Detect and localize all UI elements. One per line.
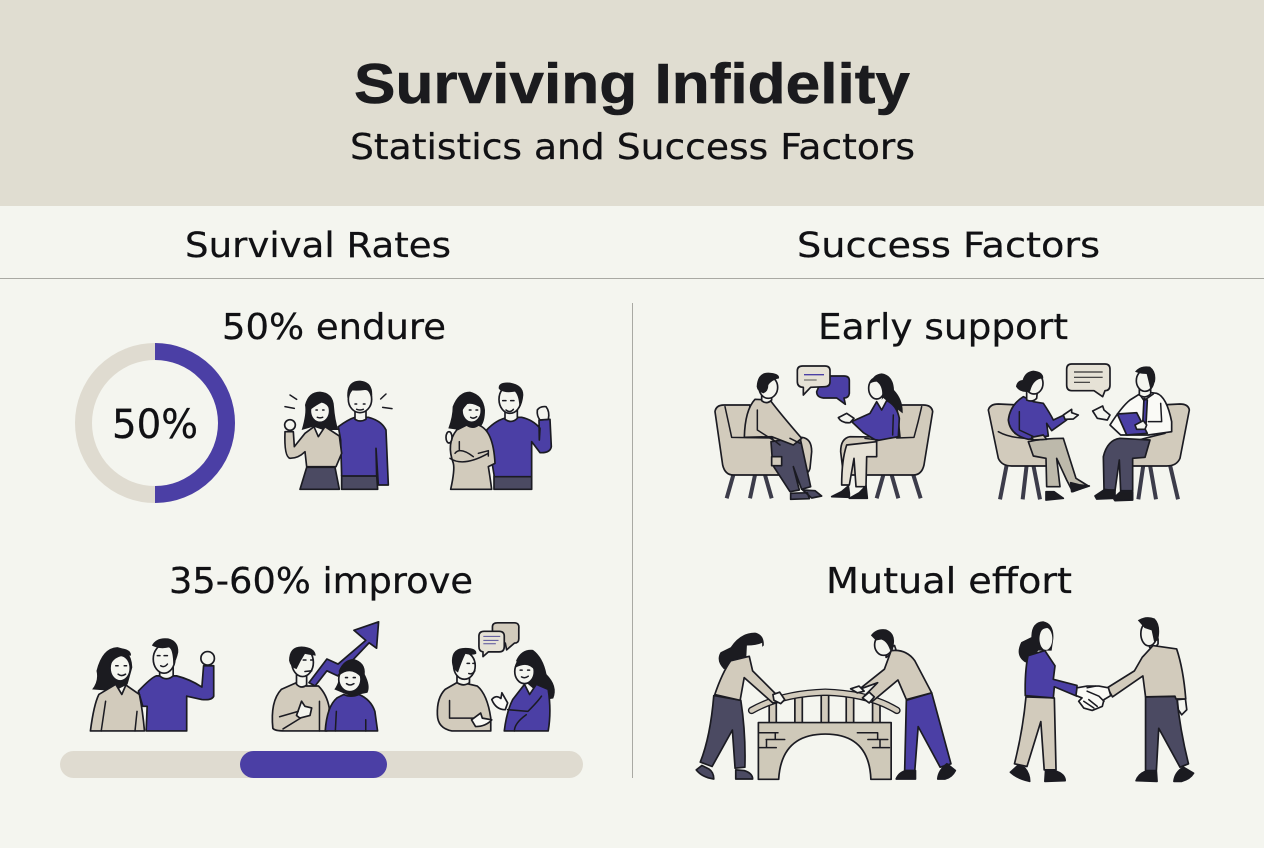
subheading: Early support: Early support xyxy=(818,307,1068,348)
subheading: 50% endure: 50% endure xyxy=(222,307,446,348)
panel: success factors xyxy=(696,307,1194,781)
woman xyxy=(1019,621,1053,662)
icon: couple smiling, woman arms crossed xyxy=(446,383,551,489)
icon: two people shaking hands xyxy=(1010,617,1194,781)
speech bubbles xyxy=(817,376,849,404)
subheading: 35-60% improve: 35-60% improve xyxy=(169,561,473,602)
range bar: 35-60% xyxy=(60,751,583,778)
subtitle: Statistics and Success Factors xyxy=(350,127,915,168)
icon: two people in armchairs talking xyxy=(715,366,933,499)
donut chart: 50% xyxy=(84,352,226,494)
left chair xyxy=(988,404,1052,466)
icon: couple with man raising fist xyxy=(90,638,214,731)
header band xyxy=(0,0,1264,206)
icon: couple talking with speech bubbles xyxy=(437,623,555,731)
icon: client and counsellor with clipboard xyxy=(988,364,1189,501)
man seated xyxy=(1103,438,1150,491)
column heading: Survival Rates: Survival Rates xyxy=(185,226,451,266)
icon: couple with upward arrow xyxy=(272,622,379,731)
right armchair xyxy=(841,405,933,475)
woman xyxy=(719,633,764,669)
woman seated xyxy=(842,442,877,487)
man xyxy=(1150,639,1158,648)
woman seated xyxy=(1028,438,1088,492)
icon: two people building a bridge together xyxy=(696,629,955,779)
handshake xyxy=(1076,686,1111,710)
bridge xyxy=(752,692,897,779)
icon: speech bubbles xyxy=(479,623,519,657)
man xyxy=(886,646,896,657)
man seated xyxy=(771,437,811,492)
column heading: Success Factors: Success Factors xyxy=(797,226,1100,266)
speech bubble xyxy=(1067,364,1110,397)
subheading: Mutual effort: Mutual effort xyxy=(826,561,1072,602)
icon: couple cheering, woman with raised fist xyxy=(285,381,392,489)
right chair xyxy=(1117,404,1189,466)
donut chart: 50%: 50% xyxy=(112,402,198,448)
panel: survival rates xyxy=(60,307,583,778)
title: Surviving Infidelity xyxy=(354,52,910,116)
left armchair xyxy=(715,405,812,475)
